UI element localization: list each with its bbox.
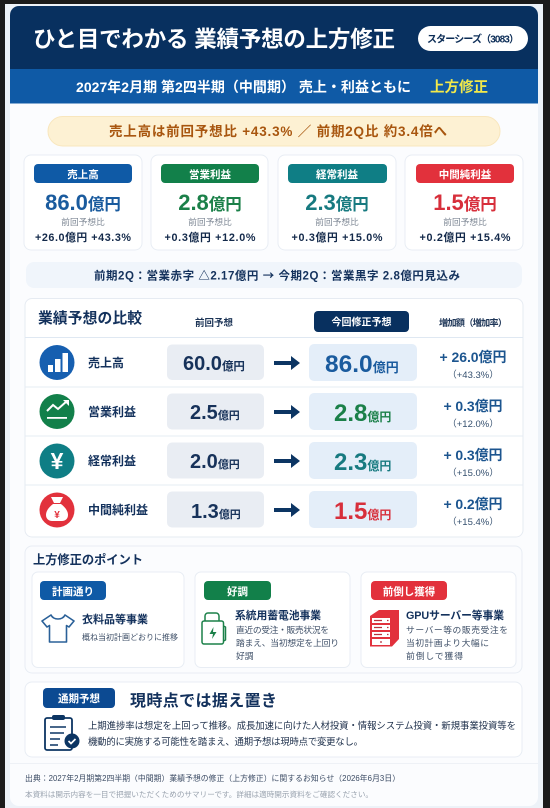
KPI card: sales: +26.0億円 +43.3% <box>35 230 131 244</box>
row: sales: 86.0億円 <box>325 351 399 378</box>
row: net profit: + 0.2億円 <box>444 496 502 512</box>
KPI card: net profit: 前回予想比 <box>443 216 487 227</box>
KPI card: ordinary profit: 経常利益 <box>316 168 358 181</box>
icon: trend line <box>40 394 74 429</box>
panel: forecast comparison <box>25 298 523 537</box>
KPI card: operating profit: 営業利益 <box>189 168 231 181</box>
KPI card: net profit: 1.5億円 <box>433 190 497 215</box>
row: ordinary profit <box>40 442 502 479</box>
row: ordinary profit: （+15.0%） <box>447 467 499 479</box>
KPI card: net profit: +0.2億円 +15.4% <box>420 230 511 244</box>
row: operating profit: 2.8億円 <box>334 400 391 427</box>
point card: GPU servers <box>361 572 516 668</box>
point card: apparel: 衣料品等事業 <box>82 612 148 626</box>
point card: battery: 好調 <box>227 585 248 598</box>
KPI card: ordinary profit: +0.3億円 +15.0% <box>292 230 383 244</box>
sub header band: 上方修正 <box>430 78 488 96</box>
KPI card: sales: 86.0億円 <box>45 190 121 215</box>
sub header band <box>10 69 538 104</box>
KPI card: ordinary profit: 2.3億円 <box>305 190 369 215</box>
title: ひと目でわかる 業績予想の上方修正 <box>33 27 395 52</box>
full-year text: 上期進捗率は想定を上回って推移。成長加速に向けた人材投資・情報システム投資・新規事業投資等を <box>88 720 516 731</box>
row: operating profit: 営業利益 <box>88 404 136 419</box>
row: sales: 60.0億円 <box>183 353 245 375</box>
row: operating profit: + 0.3億円 <box>444 398 502 414</box>
row: net profit: 1.5億円 <box>334 498 391 525</box>
column header: revised: 今回修正予想 <box>332 316 392 328</box>
icon: yen <box>40 444 74 478</box>
row: ordinary profit: 2.0億円 <box>190 451 240 473</box>
panel: full-year forecast: 機動的に実施する可能性を踏まえ、通期予想は現時点で変更なし。 <box>88 736 363 747</box>
icon: money bag: ¥ <box>54 510 60 521</box>
row: sales <box>40 344 506 381</box>
point card: GPU servers: サーバー等の販売受注を <box>406 624 508 635</box>
row: ordinary profit: + 0.3億円 <box>444 447 502 463</box>
source note: 出典：2027年2月期第2四半期（中間期）業績予想の修正（上方修正）に関するお知らせ（2026年6月3日） <box>25 773 400 783</box>
comparison heading: 業績予想の比較 <box>38 309 142 327</box>
point card: battery: 好調 <box>236 650 254 661</box>
point card: GPU servers: 前倒しで獲得 <box>406 650 463 661</box>
point card: GPU servers: 前倒し獲得 <box>383 585 436 598</box>
icon: t-shirt <box>42 615 74 642</box>
row: net profit: 中間純利益 <box>88 502 148 517</box>
icon: battery <box>202 613 226 644</box>
icon: clipboard with check <box>45 715 80 750</box>
KPI card: operating profit: +0.3億円 +12.0% <box>164 230 256 244</box>
point card: battery: 踏まえ、当初想定を上回り <box>236 637 339 648</box>
icon: yen: ¥ <box>51 448 64 474</box>
point card: GPU servers: 当初計画より大幅に <box>406 637 489 648</box>
point card: apparel <box>32 572 184 668</box>
row: sales: （+43.3%） <box>447 369 499 381</box>
column header: previous: 前回予想 <box>195 317 233 329</box>
row: ordinary profit: 2.3億円 <box>334 449 391 476</box>
point card: battery <box>195 572 350 668</box>
company badge: スターシーズ（3083） <box>427 32 519 46</box>
full-year tag <box>43 688 115 708</box>
row: net profit <box>40 491 502 528</box>
icon: bar chart <box>40 345 74 380</box>
row: operating profit <box>40 393 502 430</box>
panel: full-year forecast <box>25 682 522 757</box>
KPI card: sales <box>24 155 142 250</box>
point card: apparel: 計画通り <box>52 585 94 598</box>
header <box>10 6 538 69</box>
row: sales: + 26.0億円 <box>440 349 506 365</box>
KPI card: ordinary profit <box>278 155 396 250</box>
icon: money bag <box>40 492 74 528</box>
KPI card: ordinary profit: 前回予想比 <box>315 216 359 227</box>
KPI card: operating profit: 2.8億円 <box>178 190 242 215</box>
row: net profit: 1.3億円 <box>191 501 241 523</box>
prior period note: 前期2Q：営業赤字 △2.17億円 → 今期2Q：営業黒字 2.8億円見込み <box>94 268 460 284</box>
row: ordinary profit: 経常利益 <box>88 453 136 468</box>
KPI card: operating profit: 前回予想比 <box>188 216 232 227</box>
row: operating profit: 2.5億円 <box>190 402 240 424</box>
row: net profit: （+15.4%） <box>447 516 499 528</box>
point card: battery: 直近の受注・販売状況を <box>236 624 329 635</box>
disclaimer: 本資料は開示内容を一目で把握いただくためのサマリーです。詳細は適時開示資料をご確認ください。 <box>25 789 373 799</box>
row: operating profit: （+12.0%） <box>447 418 499 430</box>
panel: revision points <box>25 546 522 673</box>
point card: GPU servers: GPUサーバー等事業 <box>406 608 504 622</box>
KPI card: net profit <box>405 155 523 250</box>
column header: increase: 増加額（増加率） <box>439 317 507 328</box>
prior period note <box>26 262 522 288</box>
column header: revised <box>314 311 409 332</box>
icon: server <box>370 610 399 646</box>
point card: battery: 系統用蓄電池事業 <box>235 608 321 622</box>
sub header band: 2027年2月期 第2四半期（中間期） 売上・利益ともに <box>76 79 411 95</box>
point card: apparel: 概ね当初計画どおりに推移 <box>82 632 178 642</box>
row: sales: 売上高 <box>88 355 124 370</box>
highlight pill: 売上高は前回予想比 +43.3% ／ 前期2Q比 約3.4倍へ <box>109 123 448 139</box>
full-year heading: 現時点では据え置き <box>130 691 277 710</box>
KPI card: net profit: 中間純利益 <box>439 168 492 181</box>
highlight pill <box>48 116 500 146</box>
company badge <box>418 26 528 51</box>
KPI card: sales: 前回予想比 <box>61 216 105 227</box>
KPI card: sales: 売上高 <box>67 168 99 181</box>
points heading: 上方修正のポイント <box>33 552 143 567</box>
full-year tag: 通期予想 <box>58 692 100 705</box>
KPI card: operating profit <box>151 155 268 250</box>
